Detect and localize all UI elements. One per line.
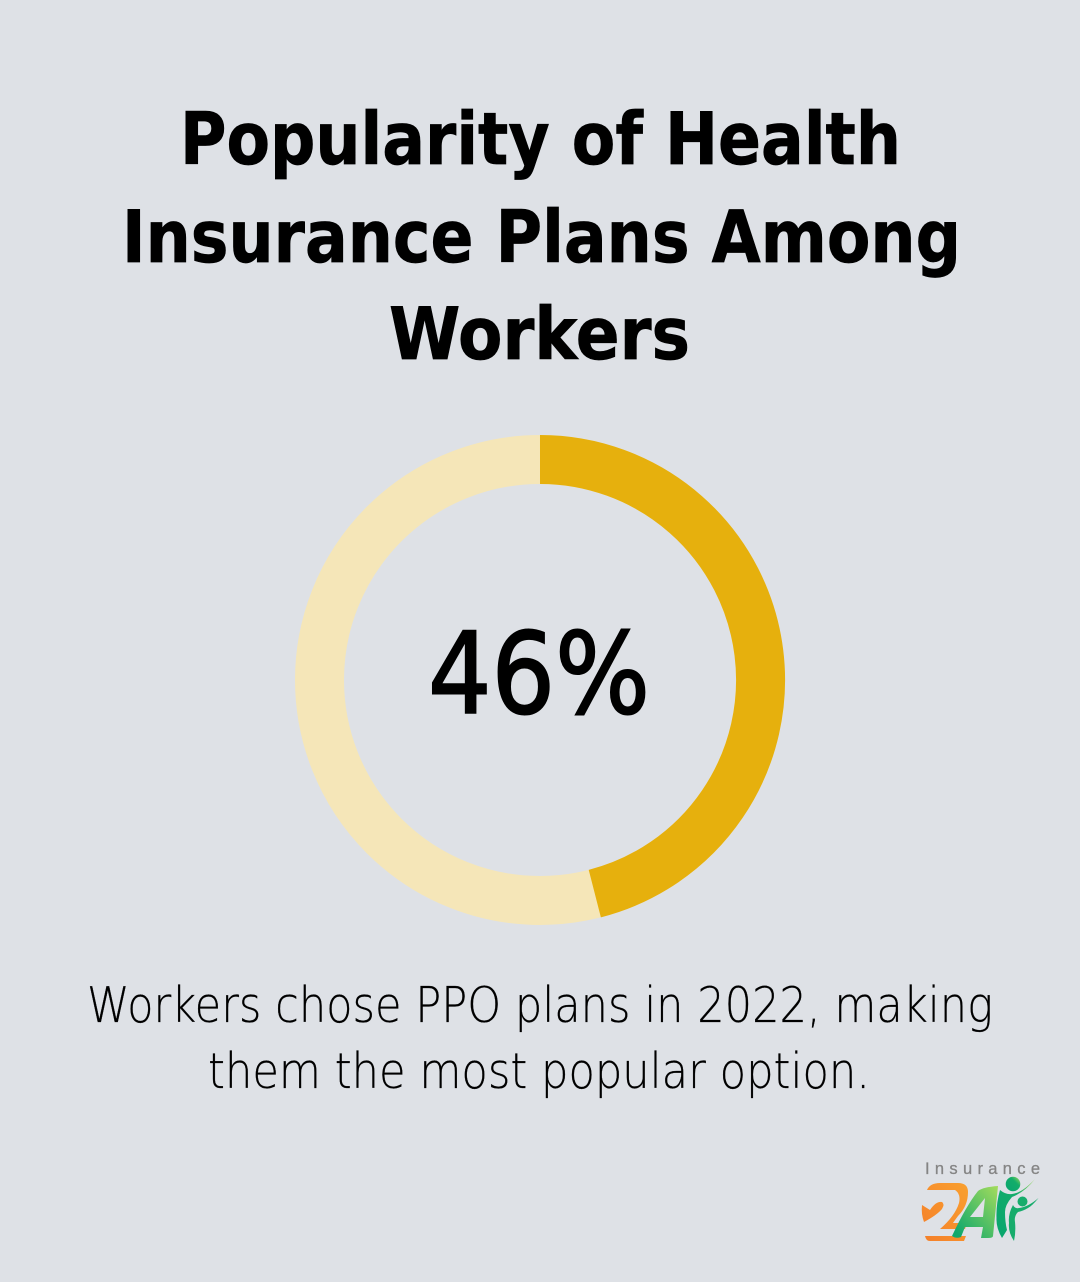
- logo: Insurance 2A: [922, 1160, 1040, 1241]
- logo wordmark: Insurance: [925, 1160, 1040, 1178]
- donut chart: 46%: [320, 459, 761, 900]
- title: Popularity of Health: [180, 97, 901, 181]
- donut value arc: [540, 459, 761, 894]
- logo figure large: [996, 1177, 1035, 1238]
- title: [122, 97, 961, 376]
- description text: [87, 977, 993, 1100]
- logo green A: [952, 1186, 998, 1238]
- logo orange 2: [922, 1183, 968, 1241]
- title: Insurance Plans Among: [122, 195, 961, 279]
- donut track: [320, 460, 760, 900]
- donut value label: 46%: [428, 610, 650, 740]
- title: Workers: [389, 292, 690, 376]
- description text: them the most popular option.: [208, 1043, 870, 1100]
- logo figure small: [1009, 1196, 1038, 1241]
